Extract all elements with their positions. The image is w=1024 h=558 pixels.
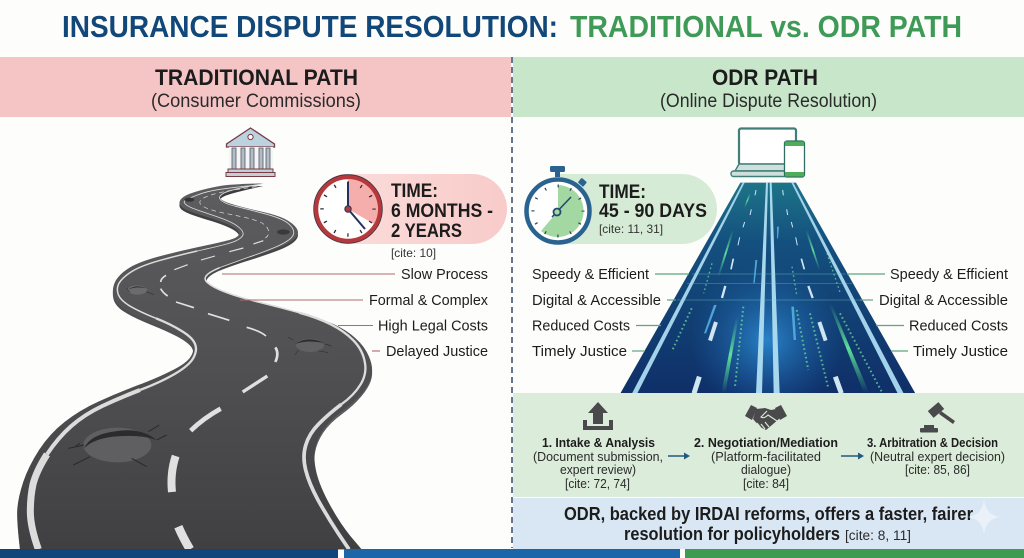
- callout: traditional time: [cite: 10]: [391, 246, 436, 260]
- icon: stopwatch: [526, 166, 590, 242]
- callout: traditional time: [314, 174, 507, 260]
- panel: conclusion: [513, 498, 1024, 549]
- panel header: traditional path: [0, 57, 511, 117]
- ODR benefits, right column: [847, 266, 1009, 360]
- callout: traditional time: 6 MONTHS -: [391, 201, 493, 222]
- icon: courthouse: [226, 128, 275, 176]
- step 2: (Platform-facilitated: [711, 449, 821, 464]
- step 3: [cite: 85, 86]: [905, 462, 970, 477]
- ODR benefits, left column: Timely Justice: [532, 343, 627, 360]
- arrow: step 2 to 3: [841, 452, 864, 460]
- ODR benefits, left column: Speedy & Efficient: [532, 266, 650, 283]
- icon: handshake: [745, 405, 787, 430]
- traditional path drawbacks: High Legal Costs: [378, 318, 488, 334]
- ODR benefits, right column: Speedy & Efficient: [890, 266, 1009, 283]
- step 2: 2. Negotiation/Mediation: [694, 435, 838, 450]
- ODR benefits, right column: Digital & Accessible: [879, 292, 1008, 309]
- step 3: [867, 435, 1005, 477]
- icon: sparkle: [968, 500, 1000, 534]
- step 2: [694, 435, 838, 491]
- step 3: (Neutral expert decision): [870, 449, 1005, 464]
- ODR benefits, right column: Timely Justice: [913, 343, 1008, 360]
- panel: conclusion: resolution for policyholders: [624, 524, 840, 544]
- ODR benefits, left column: [532, 266, 689, 360]
- panel header: ODR path: [513, 57, 1024, 117]
- ODR benefits, left column: Digital & Accessible: [532, 292, 661, 309]
- footer bars: [0, 549, 1024, 558]
- panel: conclusion: [cite: 8, 11]: [845, 528, 911, 543]
- winding road with potholes: [17, 183, 372, 549]
- panel header: ODR path: ODR PATH: [712, 65, 818, 90]
- panel header: traditional path: TRADITIONAL PATH: [155, 65, 358, 90]
- traditional path drawbacks: Formal & Complex: [369, 292, 488, 309]
- step 1: 1. Intake & Analysis: [542, 435, 655, 450]
- callout: ODR time: TIME:: [599, 182, 646, 203]
- icon: gavel: [920, 402, 955, 432]
- ODR benefits, left column: Reduced Costs: [532, 318, 630, 334]
- callout: ODR time: [526, 166, 717, 244]
- ODR benefits, right column: Reduced Costs: [909, 318, 1008, 334]
- step 1: expert review): [560, 462, 636, 477]
- panel: ODR process steps: [513, 393, 1024, 497]
- digital highway: [620, 183, 915, 393]
- panel header: traditional path: (Consumer Commissions): [151, 91, 361, 112]
- step 1: [533, 435, 663, 491]
- icon: red clock: [314, 175, 382, 243]
- title: [62, 9, 962, 44]
- step 3: 3. Arbitration & Decision: [867, 435, 998, 450]
- callout: traditional time: 2 YEARS: [391, 221, 462, 242]
- step 1: [cite: 72, 74]: [565, 476, 630, 491]
- callout: ODR time: 45 - 90 DAYS: [599, 201, 707, 222]
- panel: conclusion: ODR, backed by IRDAI reforms, offers a faster, fairer: [564, 504, 973, 524]
- callout: ODR time: [cite: 11, 31]: [599, 222, 663, 236]
- icon: upload: [583, 402, 613, 430]
- step 2: [cite: 84]: [743, 476, 789, 491]
- traditional path drawbacks: Slow Process: [401, 266, 488, 283]
- panel header: ODR path: (Online Dispute Resolution): [660, 91, 877, 112]
- traditional path drawbacks: Delayed Justice: [386, 343, 488, 360]
- icon: laptop and phone: [731, 128, 804, 177]
- step 1: (Document submission,: [533, 449, 663, 464]
- step 2: dialogue): [741, 462, 791, 477]
- traditional path drawbacks: [222, 266, 488, 360]
- title: INSURANCE DISPUTE RESOLUTION:: [62, 9, 558, 44]
- arrow: step 1 to 2: [668, 452, 690, 460]
- title: TRADITIONAL vs. ODR PATH: [570, 9, 962, 44]
- callout: traditional time: TIME:: [391, 181, 438, 202]
